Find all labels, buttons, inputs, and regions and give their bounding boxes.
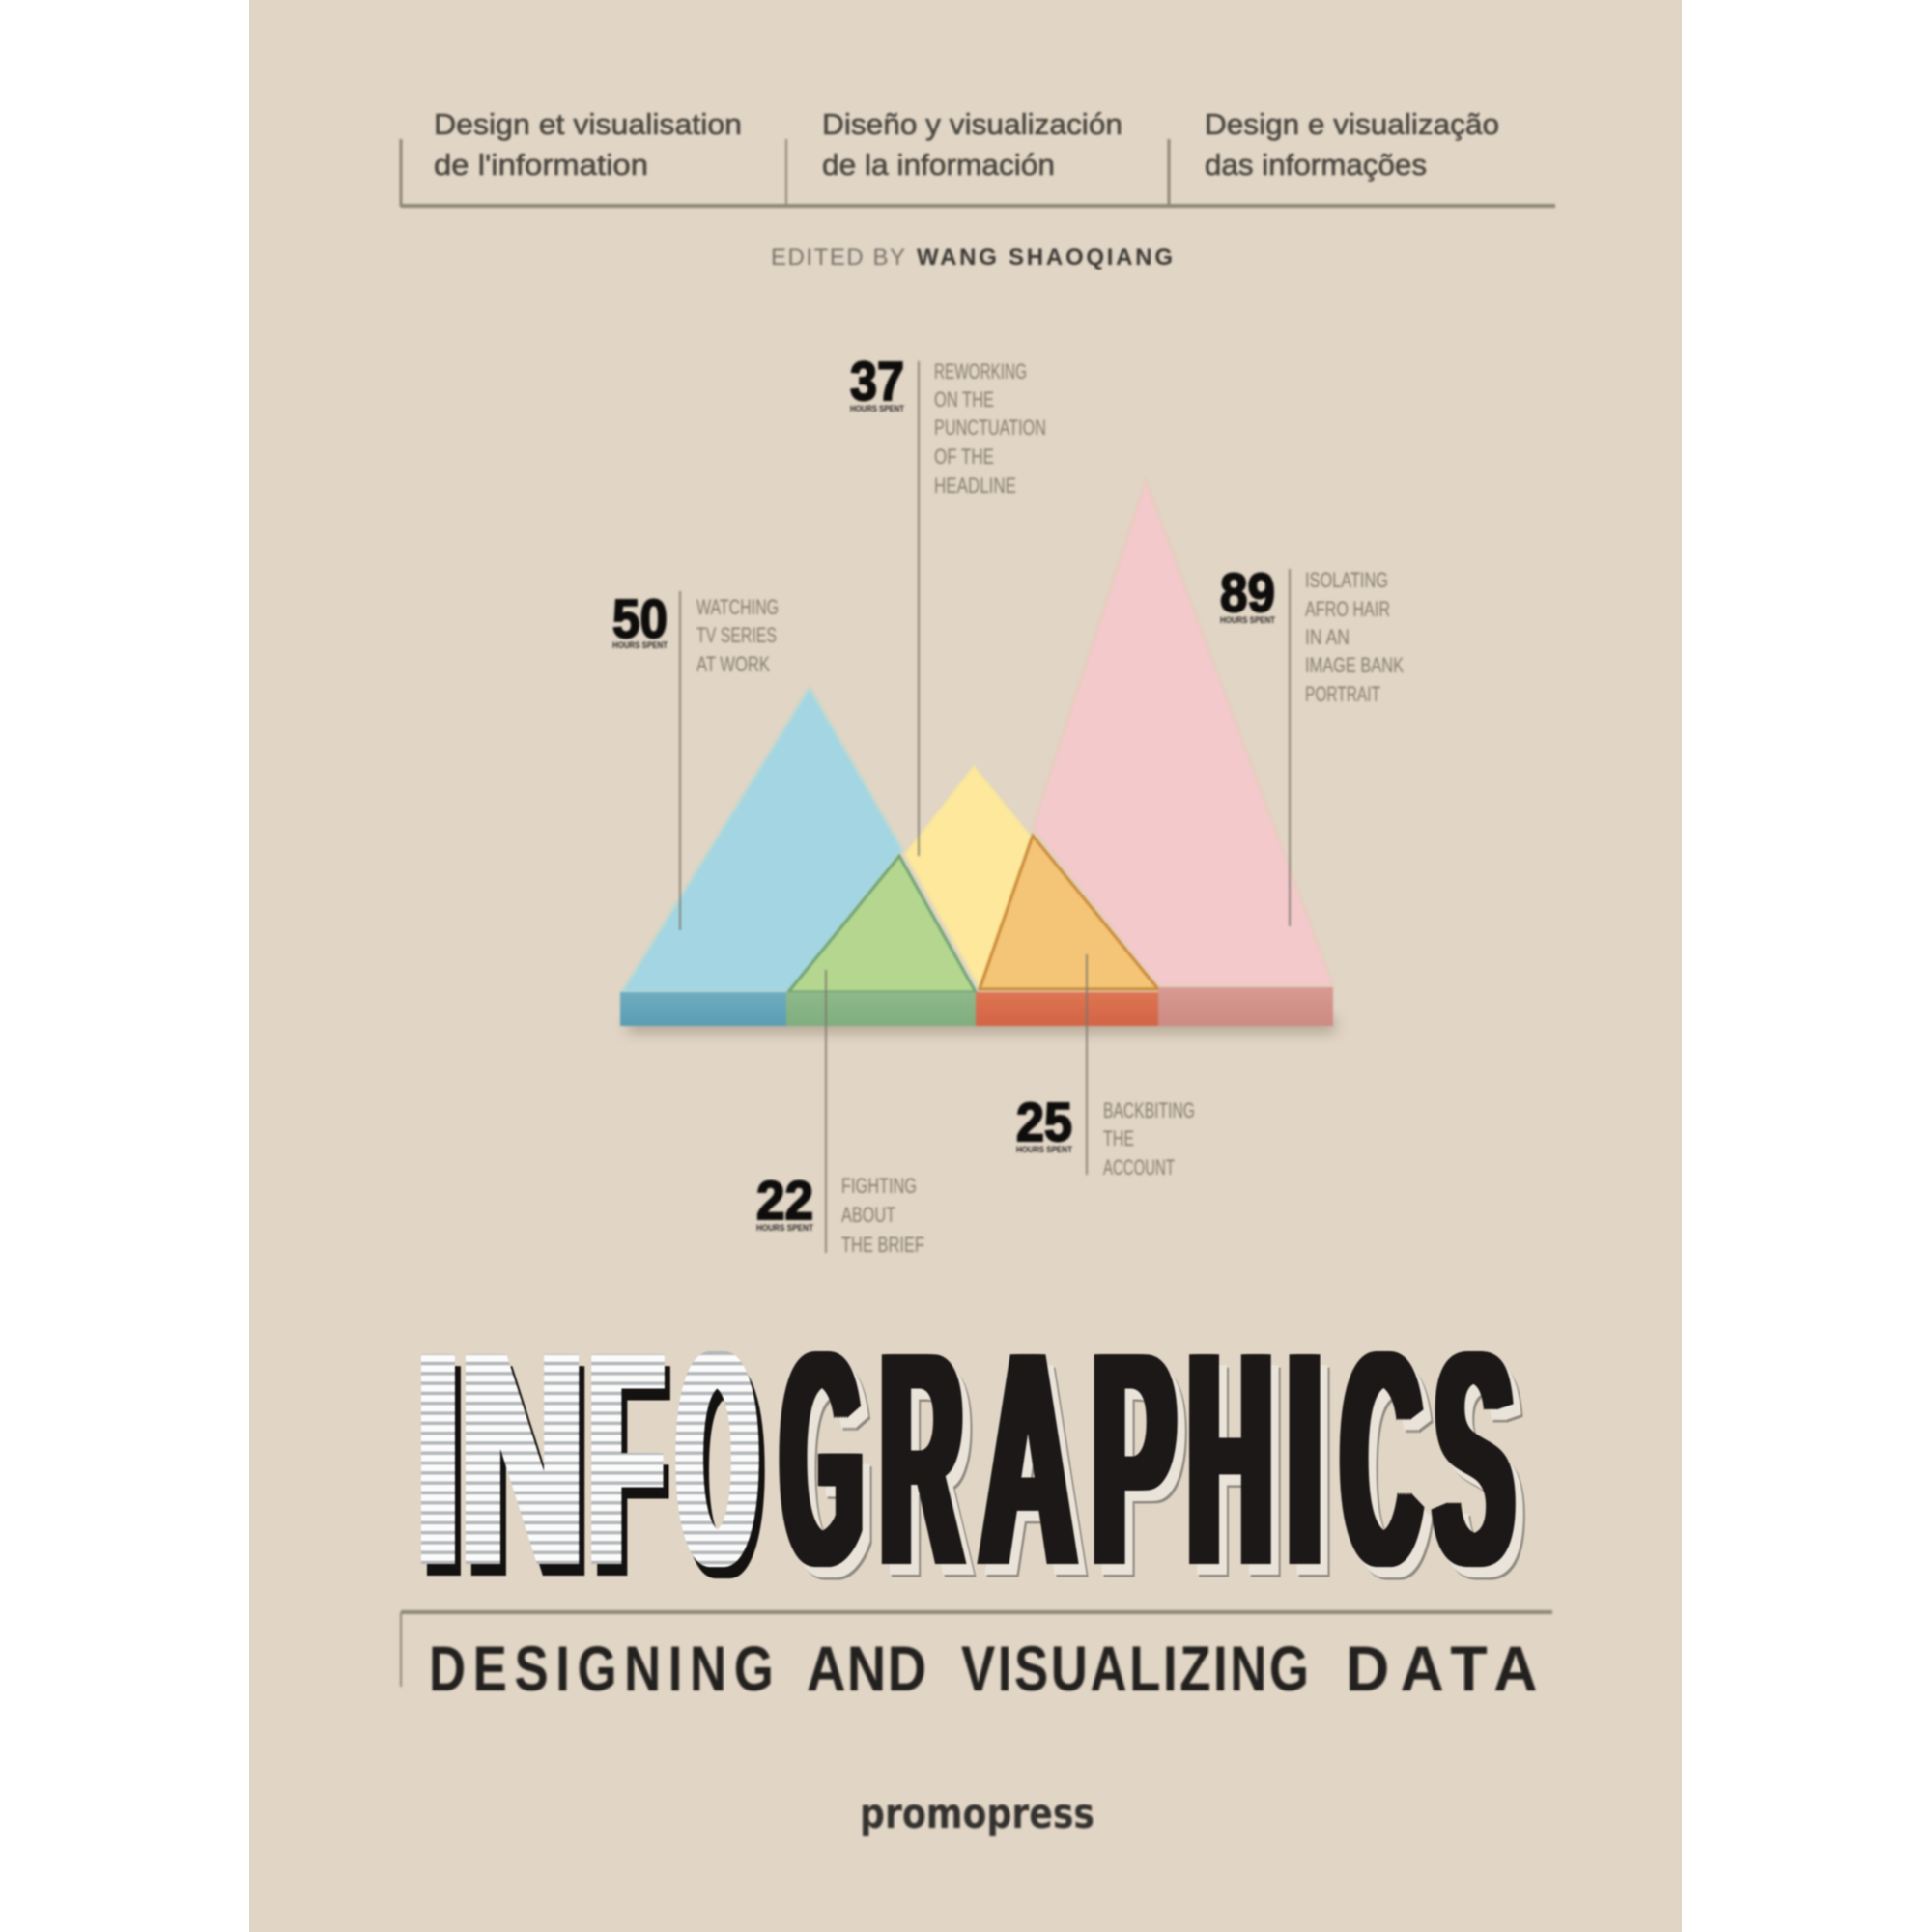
title word GRAPHICS: A bbox=[974, 1289, 1069, 1629]
yellow triangle bbox=[905, 766, 1033, 987]
callout: 22: HOURS SPENT bbox=[756, 1223, 813, 1233]
title word INFO: white stripes layer: I bbox=[412, 1289, 452, 1629]
title word INFO: white stripes layer: N bbox=[454, 1289, 578, 1629]
orange triangle bbox=[980, 836, 1158, 989]
title word INFO: grey and black shadow layer: N bbox=[454, 1289, 578, 1629]
callout: 37: OF THE bbox=[934, 444, 994, 469]
title word GRAPHICS: P bbox=[1086, 1289, 1168, 1629]
title word GRAPHICS: G bbox=[775, 1289, 856, 1629]
callout: 89: ISOLATING bbox=[1305, 568, 1388, 592]
editor credit: WANG SHAOQIANG bbox=[917, 244, 1173, 270]
pink triangle bbox=[1033, 480, 1333, 985]
callout: 89: HOURS SPENT bbox=[1220, 615, 1275, 625]
title word INFO: grey and black shadow layer bbox=[412, 1289, 857, 1629]
title word INFO: white stripes layer bbox=[420, 1354, 760, 1568]
header text: Spanish: de la información bbox=[822, 148, 1055, 182]
blue triangle bbox=[622, 688, 902, 992]
header text: French bbox=[434, 107, 742, 182]
header text: Spanish bbox=[822, 107, 1122, 182]
callout: 89: 89 bbox=[1220, 562, 1275, 624]
slab shadow bbox=[628, 1017, 1335, 1033]
title word INFO: grey and black shadow layer: I bbox=[412, 1289, 452, 1629]
callout: 50: HOURS SPENT bbox=[612, 640, 668, 650]
callout: 22: ABOUT bbox=[841, 1203, 895, 1227]
callout: 25: ACCOUNT bbox=[1103, 1155, 1175, 1179]
front slab: pink bbox=[1158, 987, 1333, 1026]
callout: 37: REWORKING bbox=[934, 359, 1027, 384]
header text: Spanish: Diseño y visualización bbox=[822, 107, 1122, 141]
callout: 89: IMAGE BANK bbox=[1305, 653, 1404, 677]
title word GRAPHICS bbox=[726, 1289, 1526, 1629]
callout: 50: 50 bbox=[612, 588, 668, 650]
publisher name: promopress bbox=[860, 1790, 1094, 1838]
title word GRAPHICS: I bbox=[1281, 1289, 1315, 1629]
title word GRAPHICS: H bbox=[1181, 1289, 1266, 1629]
title word INFO: white stripes layer: F bbox=[583, 1289, 656, 1629]
subtitle: DATA bbox=[1346, 1634, 1538, 1704]
front slab: blue bbox=[620, 992, 786, 1026]
header text: Portuguese bbox=[1205, 107, 1499, 182]
callout: 50: WATCHING bbox=[696, 595, 779, 619]
callout: 22 bbox=[756, 1170, 924, 1257]
header text: French: Design et visualisation bbox=[434, 107, 742, 141]
title word GRAPHICS: C bbox=[1335, 1289, 1414, 1629]
front slab: green bbox=[786, 992, 976, 1026]
front slab: orange bbox=[976, 992, 1158, 1026]
callout: 25 bbox=[1016, 1092, 1195, 1179]
header text: Portuguese: das informações bbox=[1205, 148, 1427, 182]
callout: 89: PORTRAIT bbox=[1305, 682, 1380, 706]
callout: 37 bbox=[850, 351, 1046, 497]
subtitle: VISUALIZING bbox=[961, 1633, 1309, 1704]
callout: 50: AT WORK bbox=[696, 652, 770, 676]
callout: 22: FIGHTING bbox=[841, 1174, 917, 1198]
editor credit bbox=[771, 244, 1173, 270]
subtitle: AND bbox=[807, 1634, 926, 1704]
title word INFO: white stripes layer: O bbox=[671, 1289, 751, 1629]
title word GRAPHICS: R bbox=[873, 1289, 955, 1629]
title word INFO: grey and black shadow layer: O bbox=[671, 1289, 751, 1629]
title word INFO: grey and black shadow layer: F bbox=[583, 1289, 656, 1629]
callout: 22: THE BRIEF bbox=[841, 1233, 924, 1257]
callout: 37: HOURS SPENT bbox=[850, 404, 904, 413]
callout: 37: 37 bbox=[850, 351, 904, 412]
callout: 50: TV SERIES bbox=[696, 623, 777, 647]
callout: 89: AFRO HAIR bbox=[1305, 597, 1390, 621]
header text: Portuguese: Design e visualização bbox=[1205, 107, 1499, 141]
callout: 50 bbox=[612, 588, 779, 676]
callout: 25: THE bbox=[1103, 1126, 1134, 1151]
green triangle bbox=[788, 856, 976, 992]
header text: French: de l'information bbox=[434, 148, 648, 182]
callout: 37: ON THE bbox=[934, 387, 994, 412]
book cover background bbox=[249, 0, 1682, 1932]
editor credit: EDITED BY bbox=[771, 244, 905, 270]
subtitle bbox=[429, 1633, 1538, 1704]
subtitle: DESIGNING bbox=[429, 1633, 774, 1704]
callout: 25: HOURS SPENT bbox=[1016, 1145, 1072, 1154]
main title bbox=[420, 1350, 1526, 1580]
callout: 89 bbox=[1220, 562, 1404, 706]
header rule with column ticks bbox=[401, 139, 1555, 207]
callout lines bbox=[680, 361, 1290, 1253]
callout: 37: PUNCTUATION bbox=[934, 415, 1046, 440]
callout: 22: 22 bbox=[756, 1170, 813, 1232]
triangle chart bbox=[620, 480, 1335, 1033]
callout: 37: HEADLINE bbox=[934, 473, 1016, 497]
callout: 25: 25 bbox=[1016, 1092, 1072, 1153]
callout: 89: IN AN bbox=[1305, 625, 1350, 649]
subtitle rule bbox=[401, 1612, 1552, 1687]
title word GRAPHICS: S bbox=[1428, 1289, 1507, 1629]
callout: 25: BACKBITING bbox=[1103, 1098, 1195, 1122]
